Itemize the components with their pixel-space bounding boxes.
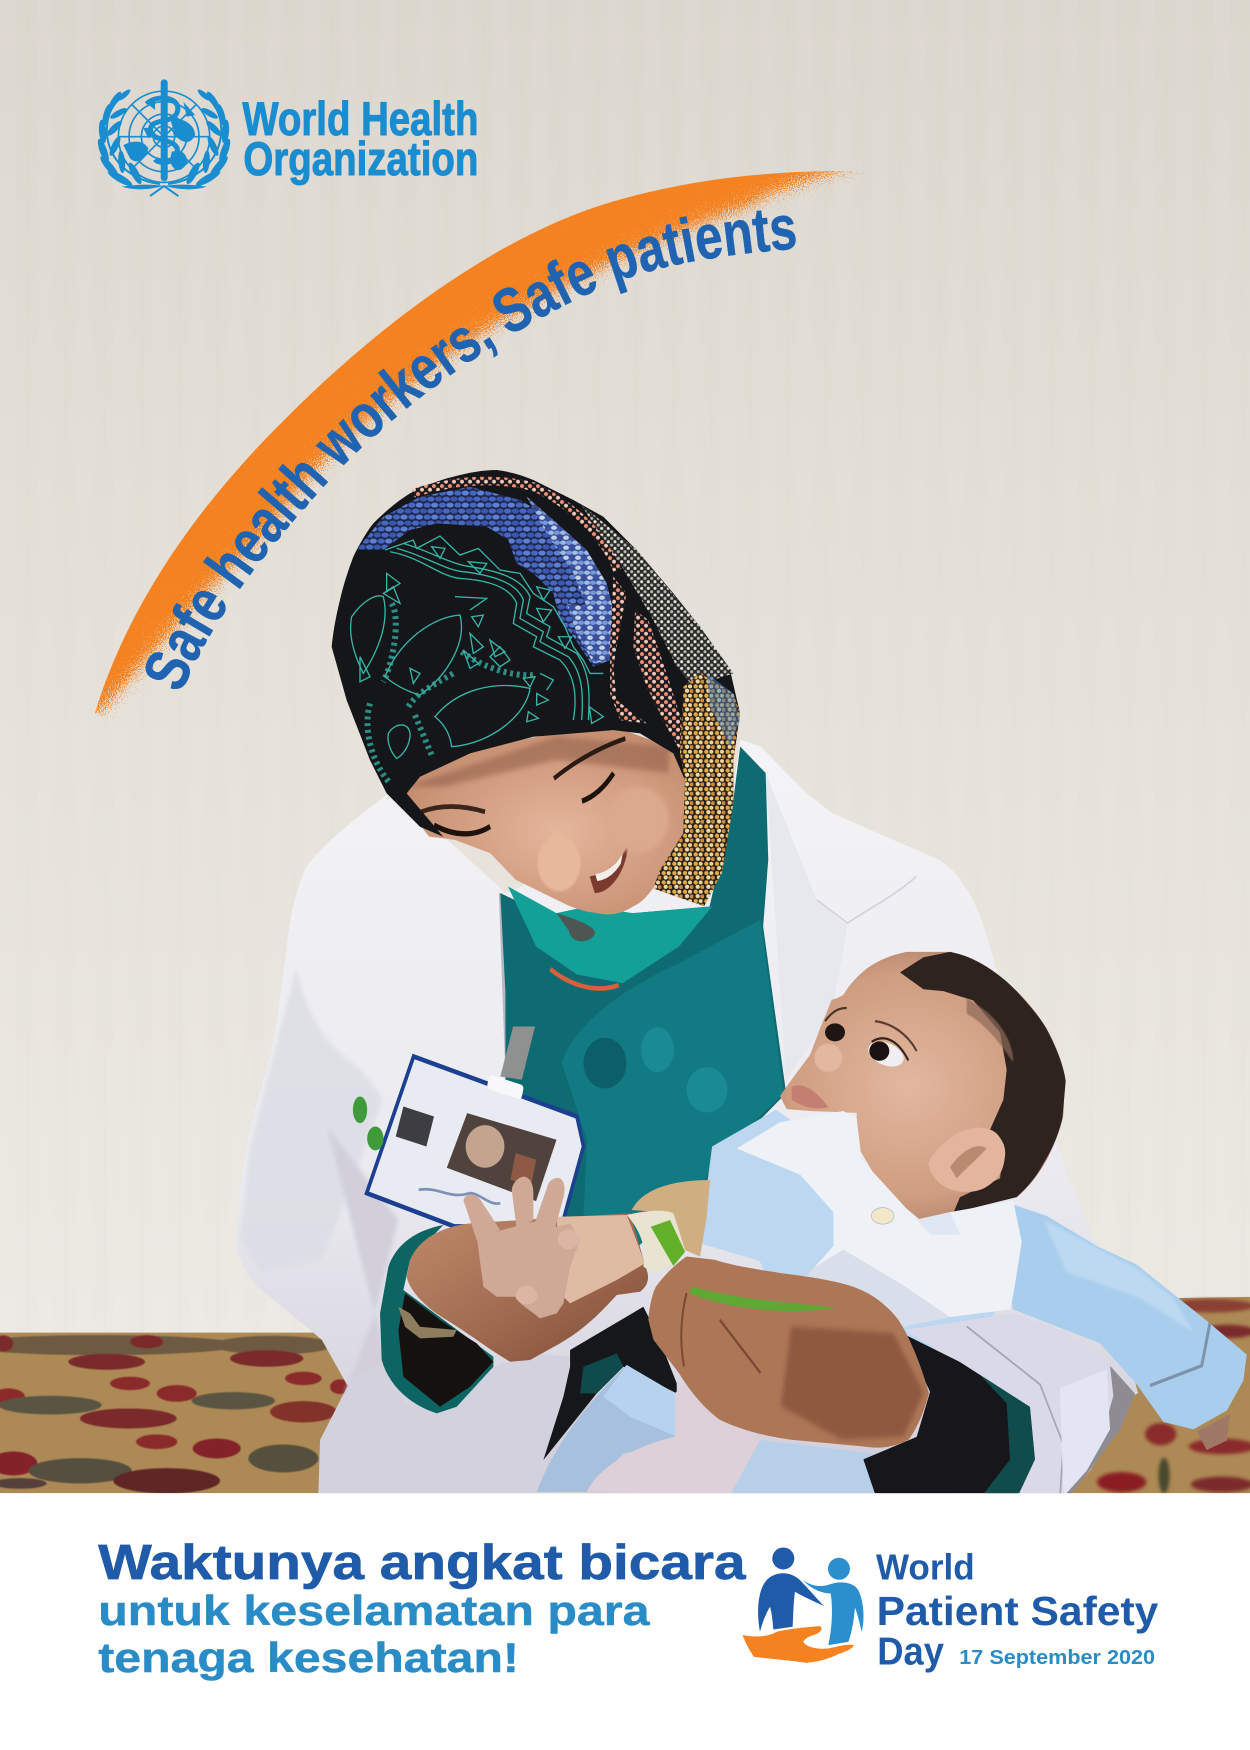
dark inner sleeve [398,1293,493,1407]
teal cuff [380,1225,493,1413]
WHO wordmark: World Health [242,93,478,146]
hijab [332,470,740,906]
health worker [237,470,1247,1499]
wrist tape [627,1211,685,1273]
multicolour drape [653,673,740,906]
World Patient Safety Day logo [743,1546,1159,1673]
logo wordmark: 17 September 2020 [959,1646,1155,1669]
watch [398,1307,457,1338]
baby head [780,952,1065,1220]
hands, cuff and lower garments [318,1177,917,1495]
blue sequin pattern [357,487,617,667]
baby white bib [737,1111,1022,1328]
lavender coat lower [318,1353,570,1495]
WHO wordmark [242,93,478,186]
carpet [0,1297,1250,1493]
face [403,730,687,914]
teal line motifs [351,536,603,783]
WHO emblem [96,79,232,196]
headline: Waktunya angkat bicara [98,1536,746,1590]
orange swoosh [95,171,881,782]
teal dress [500,746,786,1246]
logo wordmark: Patient Safety [877,1588,1159,1634]
bottom white band [0,1493,1250,1750]
WHO wordmark: Organization [243,133,478,186]
baby arm [557,1215,645,1303]
baby ear [928,1128,1005,1192]
woman's cradling hand [407,1213,648,1362]
WHO logo [96,79,478,196]
coral print [610,577,647,723]
logo wordmark: World [876,1546,975,1587]
blue cloth [537,1365,677,1492]
logo wordmark [876,1546,1159,1673]
baby hair [900,952,1066,1213]
white coat [237,740,1138,1499]
headline: untuk keselamatan para [98,1588,651,1634]
baby body blue [699,1110,995,1353]
coat cuff [903,1313,1135,1499]
neck scarf [508,886,712,988]
dark centre gap [543,1307,677,1460]
icon: two people and hand [743,1547,864,1663]
white and black print [580,503,733,687]
baby arm sleeve [1010,1205,1247,1450]
black under-sleeve [863,1334,1035,1499]
woman's right hand holding tape [648,1256,929,1448]
pale pink cloth [587,1383,760,1495]
headline: tenaga kesehatan! [98,1635,519,1681]
baby [737,952,1247,1499]
right blue cloth [732,1440,874,1494]
ID badge [353,1026,584,1226]
headline [98,1536,746,1681]
baby hand [463,1177,580,1318]
beige sleeve [632,1180,710,1257]
campaign slogan on arc: Safe health workers, Safe patients [146,210,796,689]
logo wordmark: Day [877,1629,944,1673]
baby eyes nose mouth [792,1008,917,1108]
